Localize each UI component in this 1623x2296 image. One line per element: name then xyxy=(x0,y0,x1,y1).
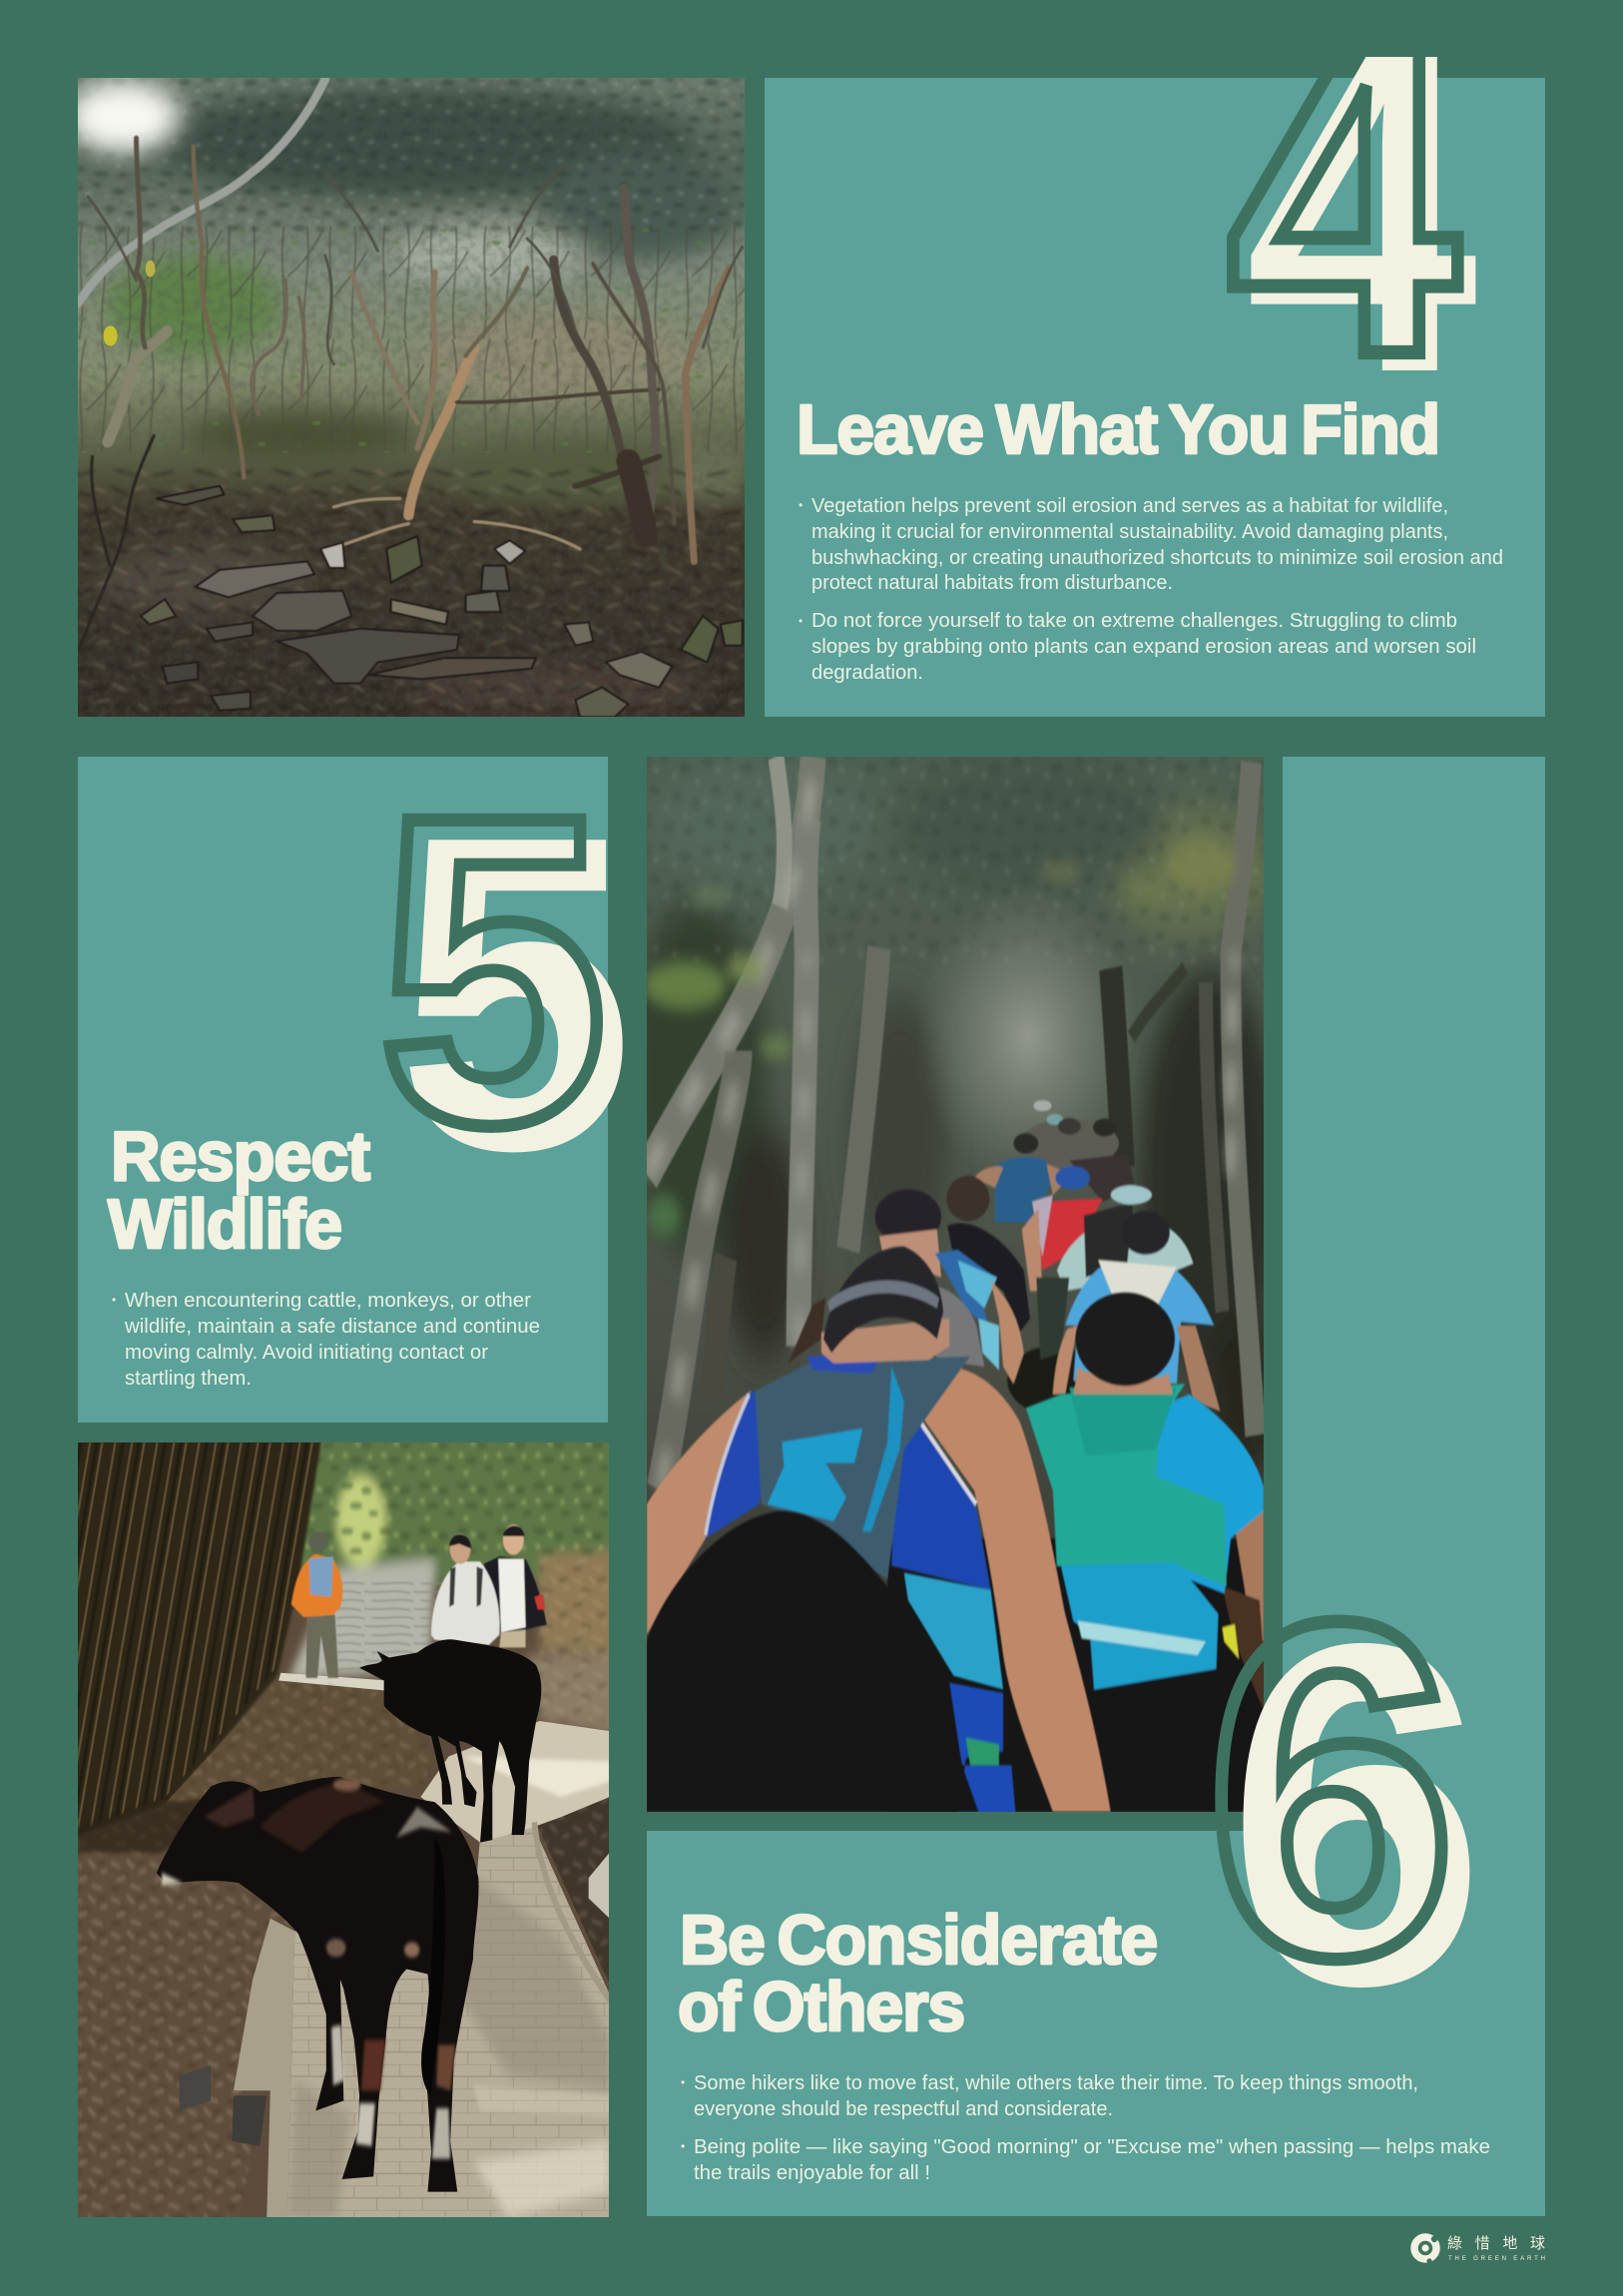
text block: step 5 rules: • xyxy=(112,1293,116,1307)
text block: step 4 rules: making it crucial for environmental sustainability. Avoid damaging plants, xyxy=(812,521,1448,543)
heading: Respect Wildlife: Wildlife xyxy=(108,1185,341,1263)
text block: step 4 rules: • xyxy=(799,614,803,628)
brick path xyxy=(180,1721,610,2218)
logo: The Green Earth: 綠惜地球 xyxy=(1447,2235,1545,2252)
numeral 6: 6 xyxy=(1230,1547,1483,2080)
text block: step 5 rules: When encountering cattle, monkeys, or other xyxy=(125,1290,531,1312)
photo: forest trail with gnarled trees and rocks xyxy=(78,78,745,717)
heading: Respect Wildlife xyxy=(108,1117,370,1263)
two hikers behind the far cow xyxy=(431,1524,547,1647)
hiker with teal pack xyxy=(887,1293,1264,1812)
photo: black cattle on a brick trail with hikers behind xyxy=(78,1442,609,2217)
heading: Leave What You Find: Leave What You Find xyxy=(797,390,1439,468)
text block: step 5 rules xyxy=(112,1290,540,1390)
panel: step 6 L-shaped background xyxy=(647,757,1545,2216)
numeral 6: 6 xyxy=(1205,1522,1458,2055)
text block: step 6 rules: • xyxy=(681,2139,685,2153)
numeral 5: 5 xyxy=(377,724,608,1216)
panel: step 5 background xyxy=(78,757,608,1423)
hiker in orange jacket xyxy=(291,1531,342,1678)
text block: step 5 rules: startling them. xyxy=(125,1368,252,1390)
logo: The Green Earth: THE GREEN EARTH xyxy=(1448,2256,1545,2262)
text block: step 4 rules: Vegetation helps prevent soil erosion and serves as a habitat for wildlife, xyxy=(812,495,1448,517)
text block: step 4 rules: protect natural habitats from disturbance. xyxy=(812,572,1173,594)
hiker in blue singlet xyxy=(647,1247,1111,1813)
heading: Respect Wildlife: Respect xyxy=(111,1117,370,1195)
logo: The Green Earth xyxy=(1414,2235,1545,2264)
text block: step 4 rules: bushwhacking, or creating unauthorized shortcuts to minimize soil erosion and xyxy=(812,547,1503,569)
heading: Be Considerate of Others xyxy=(678,1901,1157,2045)
near cow xyxy=(157,1777,479,2192)
numeral 4 xyxy=(1227,57,1475,370)
text block: step 6 rules: Being polite — like saying "Good morning" or "Excuse me" when passing — helps make xyxy=(694,2136,1490,2158)
text block: step 4 rules: • xyxy=(799,498,803,512)
hair of hiker in foreground xyxy=(647,1511,978,1812)
text block: step 6 rules: everyone should be respectful and considerate. xyxy=(694,2098,1113,2120)
heading: Be Considerate of Others: of Others xyxy=(678,1968,964,2045)
photo: hikers climbing a misty forest trail xyxy=(647,757,1264,1812)
text block: step 4 rules: Do not force yourself to take on extreme challenges. Struggling to climb xyxy=(812,610,1457,632)
text block: step 6 rules: Some hikers like to move fast, while others take their time. To keep things smooth, xyxy=(694,2072,1418,2094)
heading: Be Considerate of Others: Be Considerate xyxy=(680,1901,1157,1979)
panel: step 4 background xyxy=(765,78,1545,717)
text block: step 4 rules: slopes by grabbing onto plants can expand erosion areas and worsen soil xyxy=(812,636,1476,658)
distant crowd xyxy=(789,1100,1221,1415)
text block: step 4 rules: degradation. xyxy=(812,662,923,684)
text block: step 6 rules: the trails enjoyable for all ! xyxy=(694,2162,930,2184)
text block: step 6 rules xyxy=(681,2072,1490,2184)
far cow xyxy=(359,1639,541,1843)
numeral 5: 5 xyxy=(400,747,631,1239)
text block: step 5 rules: wildlife, maintain a safe distance and continue xyxy=(124,1316,540,1338)
bamboo thicket xyxy=(71,1433,322,1838)
text block: step 6 rules: • xyxy=(681,2075,685,2089)
text block: step 4 rules xyxy=(799,495,1503,684)
text block: step 5 rules: moving calmly. Avoid initiating contact or xyxy=(125,1342,488,1364)
icon: ring logo xyxy=(1414,2236,1437,2264)
